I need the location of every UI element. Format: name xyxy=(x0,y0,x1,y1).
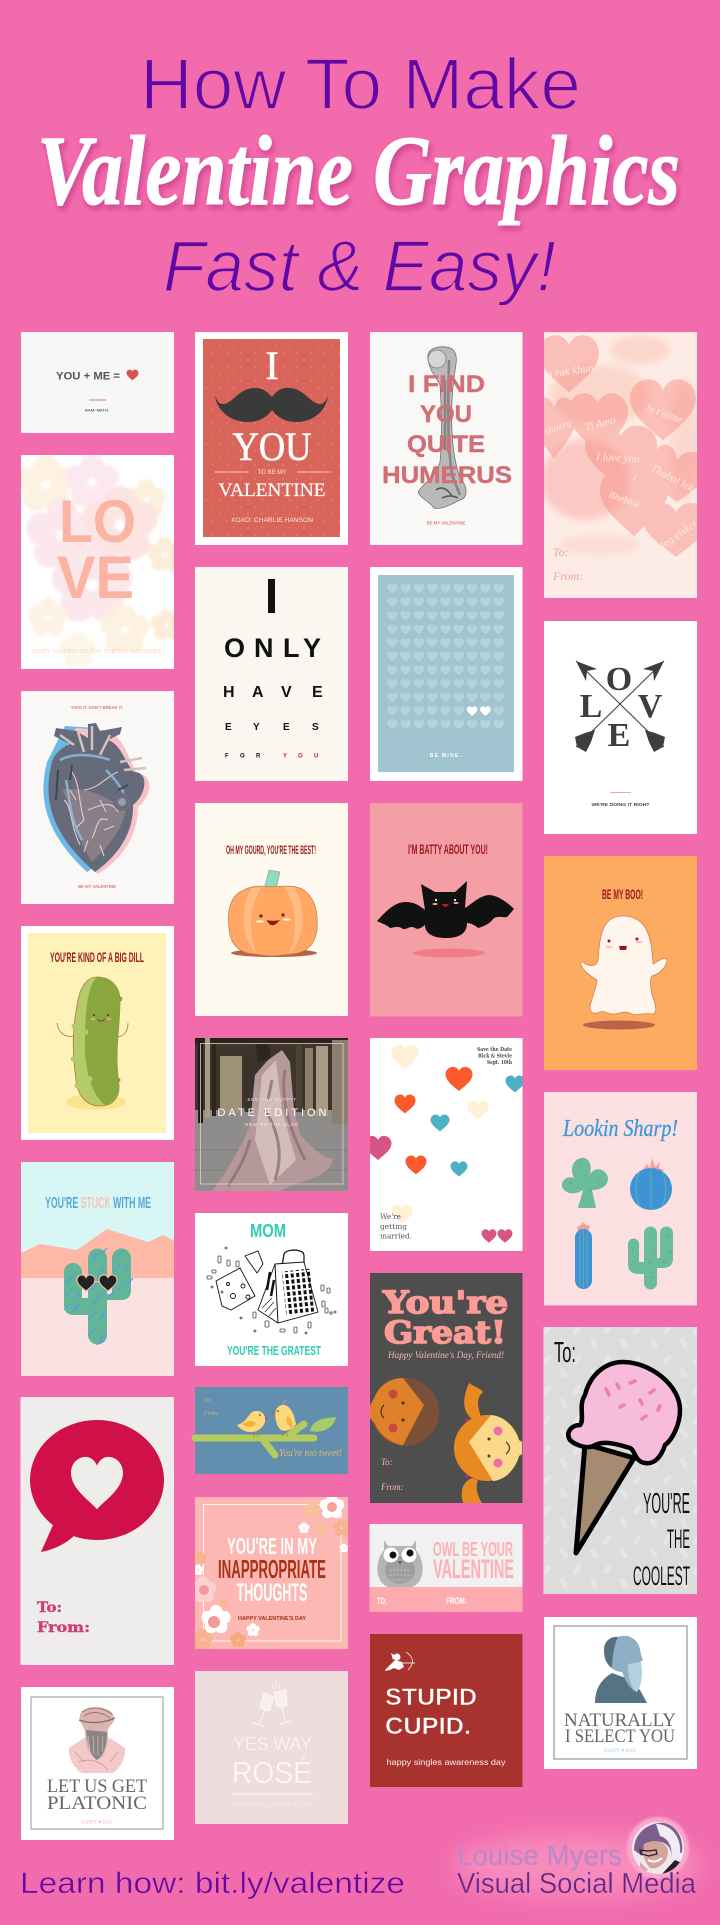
card: watercolor hearts: m rak khun xyxy=(544,362,595,381)
card: oh my gourd xyxy=(195,803,348,1016)
icon: plato bust xyxy=(69,1707,125,1773)
title line: How To Make: How To Make xyxy=(140,45,581,125)
icon: owl xyxy=(377,1540,423,1587)
scattered hearts xyxy=(364,1045,524,1243)
avatar portrait xyxy=(632,1822,684,1874)
card: anatomical heart: TAKE IT. DON'T BREAK IT. xyxy=(71,705,123,710)
card: be my boo: BE MY BOO! xyxy=(602,886,643,902)
card: stupid cupid xyxy=(370,1634,522,1787)
card: eye chart: YOU xyxy=(283,754,318,760)
card: watercolor hearts xyxy=(544,332,697,598)
card: watercolor hearts: From: xyxy=(552,569,583,583)
card: mom you're the gratest xyxy=(195,1213,348,1366)
card: stupid cupid: STUPID xyxy=(385,1684,477,1711)
card: owl be your valentine: OWL BE YOUR xyxy=(433,1539,513,1561)
icon: cactus with sunglasses xyxy=(64,1248,133,1345)
card: lookin sharp cacti: Lookin Sharp! xyxy=(562,1116,678,1142)
card: let us get platonic: PLATONIC xyxy=(47,1793,147,1814)
card: save the date hearts xyxy=(364,1038,524,1251)
arrows flanking tagline xyxy=(214,471,330,473)
footer link: learn how: Learn how: bit.ly/valentize xyxy=(20,1867,405,1900)
card: watercolor hearts: I love you xyxy=(595,451,640,465)
floral corners xyxy=(190,1494,351,1650)
card: humerus: BE MY VALENTINE xyxy=(427,520,466,526)
card: stupid cupid: happy singles awareness day xyxy=(386,1757,506,1767)
card: eye chart: ONLY xyxy=(224,633,321,663)
icon: bat xyxy=(377,881,514,938)
card: you're great: You're xyxy=(382,1285,508,1321)
card: too tweet birds: To: xyxy=(204,1398,212,1404)
watercolor hearts group xyxy=(544,335,697,557)
icon: darwin bust xyxy=(595,1636,647,1703)
card: you're great xyxy=(370,1273,522,1503)
icon: cupid xyxy=(385,1652,415,1671)
card: naturally i select you: I SELECT YOU xyxy=(565,1726,675,1747)
card: humerus: QUITE xyxy=(407,431,485,458)
crossed arrows xyxy=(575,661,665,752)
card: mustache: YOU xyxy=(232,424,312,469)
card: save the date hearts: Rick & Stevie xyxy=(478,1054,513,1060)
icon: pumpkin xyxy=(228,870,317,957)
card: watercolor hearts: Bhebhik xyxy=(607,489,642,511)
card: you're great: From: xyxy=(380,1482,404,1492)
icon: champagne glasses xyxy=(252,1682,291,1727)
card: humerus: I FIND xyxy=(408,371,485,398)
card: yes way rose: ROSÉ xyxy=(232,1755,312,1790)
card: watercolor hearts: Ti Amo xyxy=(584,414,617,434)
card: speech bubble heart: From: xyxy=(37,1620,90,1636)
icon: tall blue cactus xyxy=(575,1222,592,1289)
title xyxy=(37,45,680,307)
card: anatomical heart xyxy=(21,691,174,904)
card: let us get platonic: LET US GET xyxy=(47,1776,147,1797)
card: humerus: HUMERUS xyxy=(382,462,512,489)
card: stupid cupid: CUPID. xyxy=(385,1713,471,1740)
card: eye chart: EYES xyxy=(225,722,319,733)
card: you + me = heart: YOU + ME = xyxy=(56,370,120,382)
card: let us get platonic xyxy=(21,1687,174,1840)
card: love arrows: E xyxy=(608,717,630,754)
card: yes way rose: HAPPY VALENTINE'S DAY xyxy=(232,1803,312,1809)
floral background xyxy=(17,454,183,666)
card: mustache xyxy=(195,332,348,545)
hearts grid xyxy=(387,584,504,729)
card: speech bubble heart xyxy=(20,1397,174,1665)
card: too tweet birds: You're too tweet! xyxy=(279,1448,342,1459)
card: ice cream coolest: THE xyxy=(667,1524,690,1554)
card: naturally i select you: NATURALLY xyxy=(564,1710,676,1731)
card: be mine hearts grid: BE MINE. xyxy=(430,753,462,759)
icon: ghost xyxy=(581,916,667,1015)
card: watercolor hearts: Jeg elsker xyxy=(657,517,701,552)
icon: ice cream cone xyxy=(568,1362,680,1553)
icon: two birds xyxy=(237,1401,296,1437)
card: batty about you: I'M BATTY ABOUT YOU! xyxy=(408,841,488,857)
card: owl be your valentine xyxy=(370,1524,522,1612)
card: too tweet birds xyxy=(195,1387,348,1474)
card: mustache: I xyxy=(265,343,279,388)
card: you + me = heart xyxy=(21,332,174,433)
card: date edition photo: SEE THE OUTFIT xyxy=(247,1097,297,1102)
title line: Fast and Easy: Fast & Easy! xyxy=(163,227,556,307)
icon: ball cactus xyxy=(630,1158,672,1210)
card: let us get platonic: HAPPY ♥ DAY xyxy=(81,1820,113,1826)
card: stuck with me cactus: YOU'RE STUCK WITH ME xyxy=(45,1195,151,1212)
card: be my boo xyxy=(544,856,697,1070)
card: inappropriate thoughts: THOUGHTS xyxy=(236,1579,308,1607)
card: yes way rose: YES WAY xyxy=(233,1734,312,1754)
card: owl be your valentine: TO: xyxy=(377,1596,387,1606)
card: ice cream coolest: To: xyxy=(554,1337,576,1369)
card: eye chart: FOR xyxy=(225,754,261,760)
brand name line one: Louise Myers xyxy=(457,1840,622,1872)
icon: anatomical heart xyxy=(43,723,149,874)
card: save the date hearts: Save the Date xyxy=(477,1047,513,1053)
card: mustache: TO BE MY xyxy=(258,470,286,476)
card: inappropriate thoughts: INAPPROPRIATE xyxy=(218,1554,326,1584)
card: mustache: VALENTINE xyxy=(218,480,326,501)
card: humerus: YOU xyxy=(420,401,472,428)
card: you're great: Happy Valentine's Day, Friend! xyxy=(387,1351,504,1361)
card: owl be your valentine: FROM: xyxy=(446,1596,467,1606)
card: date edition photo: DATE EDITION xyxy=(218,1107,327,1119)
card: date edition photo xyxy=(195,1038,348,1191)
card: inappropriate thoughts xyxy=(190,1494,351,1650)
icon: bone xyxy=(418,347,466,508)
icon: cheese grater xyxy=(216,1250,318,1323)
card: save the date hearts: getting xyxy=(380,1222,407,1231)
card: love floral: HAPPY VALENTINE'S DAY FOR THE 'WEIRDOES' xyxy=(32,649,162,655)
card: love arrows: O xyxy=(606,661,632,698)
card: stuck with me cactus xyxy=(21,1162,174,1376)
card: inappropriate thoughts: HAPPY VALENTINE'S DAY xyxy=(238,1616,307,1622)
card: lookin sharp cacti xyxy=(544,1092,697,1306)
card: inappropriate thoughts: YOU'RE IN MY xyxy=(227,1533,317,1559)
card: watercolor hearts: Je t'aime xyxy=(643,402,684,426)
icon: boy and girl faces xyxy=(370,1378,522,1503)
card: ice cream coolest xyxy=(544,1327,697,1594)
card: mustache: XOXO: CHARLIE HANSON xyxy=(231,517,313,524)
icon: branch with leaf xyxy=(195,1417,336,1455)
card: humerus xyxy=(370,332,522,545)
icon: round green cactus xyxy=(562,1158,608,1208)
card: eye chart: HAVE xyxy=(223,684,323,701)
watercolor wash xyxy=(541,336,701,555)
brand name line two: Visual Social Media xyxy=(457,1868,697,1900)
card: love arrows: WE'RE DOING IT RIGHT xyxy=(592,802,650,808)
card: yes way rose xyxy=(195,1671,348,1824)
card: naturally i select you xyxy=(544,1617,697,1769)
card: naturally i select you: HAPPY ♥ DAY xyxy=(604,1749,636,1754)
card: oh my gourd: OH MY GOURD, YOU'RE THE BEST! xyxy=(226,845,316,857)
card: watercolor hearts: Thabal leka xyxy=(649,462,701,497)
card: big dill xyxy=(21,926,174,1140)
card: owl be your valentine: VALENTINE xyxy=(433,1554,514,1584)
card: you + me = heart: BAM! MATH. xyxy=(85,408,109,412)
icon: pickle xyxy=(57,977,128,1110)
card: big dill: YOU'RE KIND OF A BIG DILL xyxy=(50,949,144,965)
card: date edition photo: NEW ON THE BLOG xyxy=(245,1122,299,1127)
icon: saguaro cactus xyxy=(628,1227,673,1290)
icon: mustache xyxy=(215,388,328,422)
card: love arrows: V xyxy=(638,688,663,725)
card: love floral: LO xyxy=(59,488,136,555)
card: love arrows: L xyxy=(580,688,602,725)
card: save the date hearts: married. xyxy=(380,1232,412,1240)
card: batty about you xyxy=(370,803,522,1016)
card: watercolor hearts: shiteru xyxy=(543,418,573,438)
card: eye chart xyxy=(195,567,348,781)
card: speech bubble heart: To: xyxy=(37,1600,62,1616)
card: mom you're the gratest: MOM xyxy=(250,1221,286,1241)
card: you're great: Great! xyxy=(384,1315,506,1351)
card: watercolor hearts: To: xyxy=(553,545,569,559)
card: love floral xyxy=(17,454,183,669)
cheese crumbs xyxy=(207,1247,336,1334)
card: be mine hearts grid xyxy=(370,567,522,781)
icon: speech bubble with heart xyxy=(30,1420,164,1552)
card: save the date hearts: We're xyxy=(380,1212,402,1221)
card: you're great: To: xyxy=(381,1457,393,1467)
card: save the date hearts: Sept. 10th xyxy=(487,1060,512,1066)
card: mom you're the gratest: YOU'RE THE GRATEST xyxy=(227,1343,321,1358)
card: anatomical heart: BE MY VALENTINE xyxy=(78,884,116,889)
card: love arrows xyxy=(544,621,697,834)
card: too tweet birds: From: xyxy=(203,1411,219,1417)
branding: Louise Myers Visual Social Media xyxy=(453,1817,703,1900)
card: love floral: VE xyxy=(57,544,134,611)
